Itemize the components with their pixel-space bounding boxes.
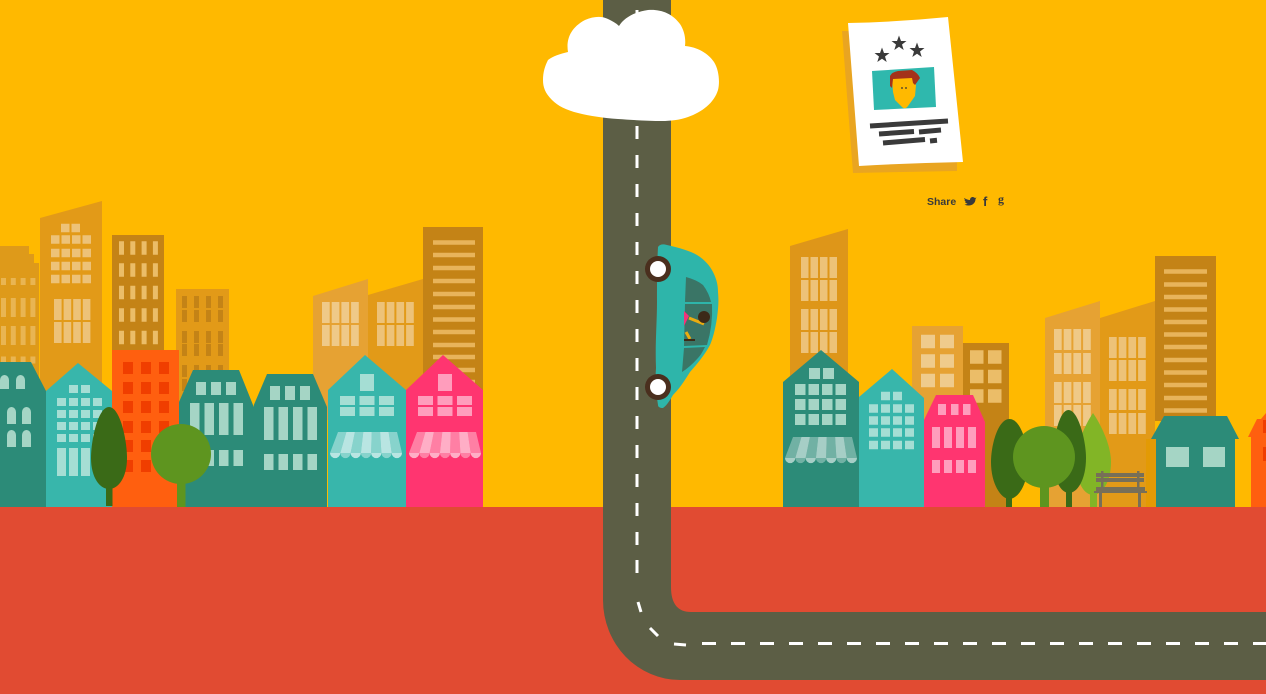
awning xyxy=(409,432,481,458)
tower: light slanted roof xyxy=(1045,301,1100,507)
tower: ochre with dark windows xyxy=(176,289,229,419)
house: teal gabled xyxy=(859,369,924,507)
road horizontal dashes xyxy=(702,642,1266,645)
house: teal gabled xyxy=(46,363,112,507)
car windows xyxy=(682,277,712,372)
right skyline: back towers xyxy=(790,229,1216,507)
tower: light slanted roof xyxy=(313,279,368,420)
right street: front houses xyxy=(783,350,1266,507)
sliver beside house xyxy=(1146,439,1156,507)
house: dark teal left xyxy=(179,370,253,507)
tower: mid slanted roof xyxy=(368,279,423,420)
house: dark teal arched xyxy=(0,362,46,507)
tower: slanted roof xyxy=(40,201,102,420)
icon: twitter xyxy=(964,197,976,206)
awning xyxy=(785,437,857,463)
stars xyxy=(874,36,924,62)
wheel: rear xyxy=(645,374,671,400)
house: pink xyxy=(924,395,985,507)
tree: dark tall xyxy=(1053,410,1086,507)
poster xyxy=(842,17,963,173)
bench xyxy=(1094,471,1147,507)
tower: dark ochre xyxy=(112,235,164,365)
tower: slanted roof xyxy=(790,229,848,420)
tree: tall dark xyxy=(91,407,127,506)
shop: dark teal with awning xyxy=(783,350,859,507)
shop: teal with awning xyxy=(328,355,406,507)
tree: round xyxy=(1013,426,1075,507)
poster shadow xyxy=(842,31,957,173)
share row xyxy=(927,192,1004,209)
text bars xyxy=(870,121,948,143)
tower: dark striped xyxy=(1155,256,1216,421)
tree: light green pointed xyxy=(1076,413,1111,507)
ground xyxy=(0,507,1266,694)
wheel: front xyxy=(645,256,671,282)
car xyxy=(645,244,718,408)
poster sheet xyxy=(848,17,963,166)
house: orange cut off xyxy=(1248,413,1266,507)
road centre dashes xyxy=(637,10,686,645)
building: orange xyxy=(112,350,179,507)
shop: pink with awning xyxy=(406,355,483,507)
tower: far left xyxy=(0,246,39,507)
tower: dark striped xyxy=(423,227,483,407)
portrait xyxy=(872,67,936,110)
tower: light block xyxy=(912,326,963,507)
house: dark teal cottage xyxy=(1151,416,1239,507)
icon: google: g xyxy=(998,192,1004,206)
road xyxy=(603,0,1266,680)
tower: mid slanted roof xyxy=(1100,301,1156,507)
share label: Share xyxy=(927,196,956,208)
car body xyxy=(656,244,718,408)
tree: dark left xyxy=(991,419,1028,507)
driver xyxy=(684,311,710,340)
icon: facebook: f xyxy=(983,194,988,209)
tower: dark block xyxy=(963,343,1009,507)
house: dark teal right xyxy=(253,374,327,507)
awning xyxy=(330,432,402,458)
cloud xyxy=(543,10,719,121)
left skyline: back towers xyxy=(0,201,483,507)
left street: front houses xyxy=(0,350,483,507)
tree: round xyxy=(151,424,211,507)
